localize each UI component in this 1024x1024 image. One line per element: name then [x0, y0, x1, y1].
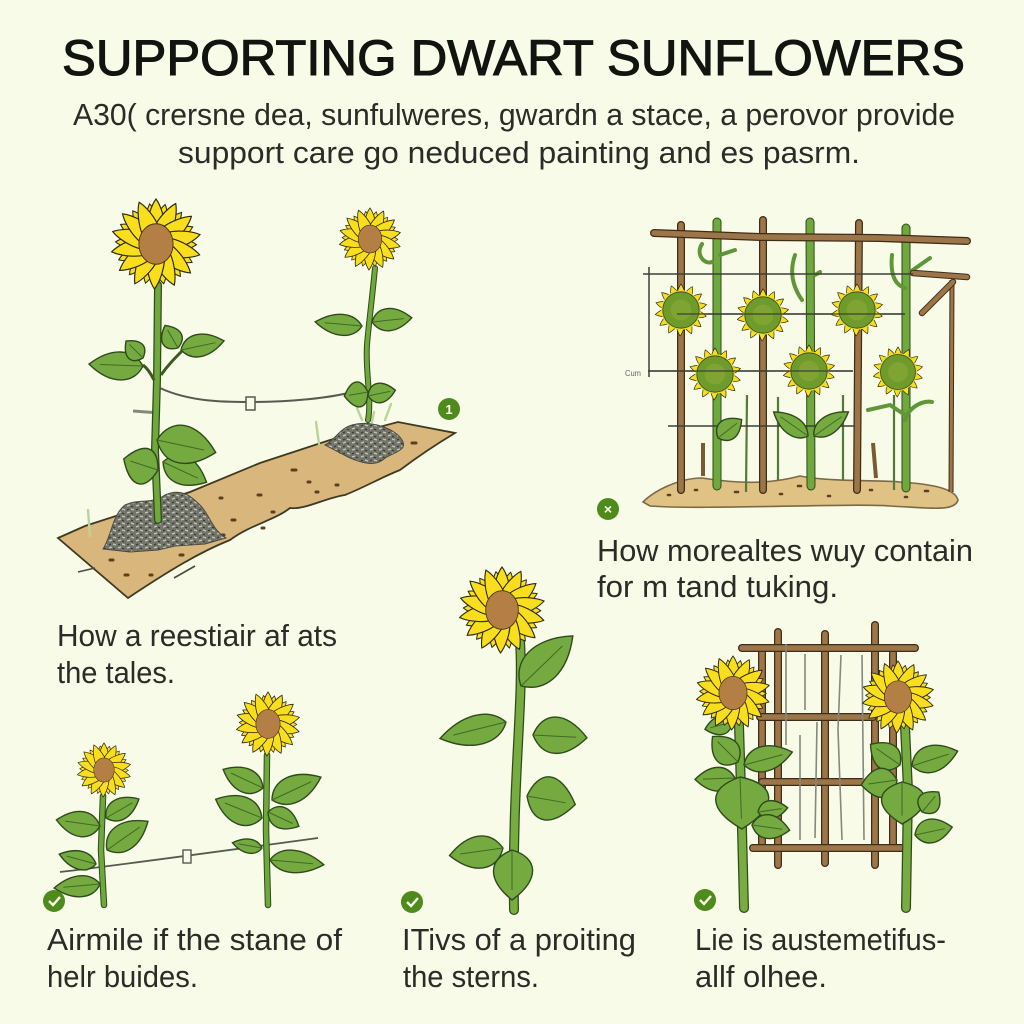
- panel: single sunflower: [437, 563, 588, 910]
- icon: step 1 badge: 1: [445, 402, 453, 417]
- small measurement label: Cum: [625, 369, 641, 378]
- wires over flowers: [648, 314, 905, 371]
- top rail and brace: [654, 233, 967, 313]
- caption: lattice trellis: [695, 922, 946, 994]
- intro text: support care go neduced painting and es pasrm.: [178, 135, 860, 170]
- plant: small left: [53, 741, 155, 905]
- tie line with clip: [60, 838, 318, 872]
- title: SUPPORTING DWART SUNFLOWERS: [62, 30, 965, 86]
- soil specks: [110, 443, 416, 575]
- guy line with clip: [133, 388, 352, 413]
- icon: step 2 badge: [597, 498, 619, 520]
- panel: soil strip with guy line: [58, 195, 455, 598]
- icon: step 2 badge: ×: [604, 501, 612, 517]
- panel: tall trellis: [625, 220, 967, 508]
- panel: lattice trellis: [692, 625, 962, 908]
- caption: panel one: How a reestiair af ats: [57, 618, 337, 653]
- plant: right: [314, 205, 413, 420]
- gravel mound right: [325, 423, 404, 463]
- horizontal wires: [643, 267, 913, 426]
- caption: two staked plants: Airmile if the stane of: [47, 922, 342, 957]
- intro text: [73, 97, 955, 170]
- caption: single sunflower: ITivs of a proiting: [402, 922, 636, 957]
- caption: tall trellis: [597, 533, 973, 604]
- icon: step 1 badge: [438, 398, 460, 420]
- icon: check badge right: [694, 889, 716, 911]
- plant: tall left: [89, 195, 226, 520]
- gravel mound left: [103, 492, 226, 552]
- icon: check badge left: [43, 890, 65, 912]
- caption: single sunflower: [402, 922, 636, 994]
- caption: lattice trellis: allf olhee.: [695, 959, 827, 994]
- soil strip: [58, 422, 455, 598]
- wooden posts: [681, 220, 952, 492]
- lattice frame: [742, 625, 915, 865]
- intro text: A30( crersne dea, sunfulweres, gwardn a stace, a perovor provide: [73, 97, 955, 132]
- trellis leaves: [711, 404, 853, 446]
- caption: single sunflower: the sterns.: [403, 959, 539, 994]
- soil bed: [643, 476, 958, 508]
- grass tufts: [88, 404, 391, 536]
- plant: lattice left: [692, 653, 795, 908]
- panel: two staked plants: [53, 689, 326, 905]
- green stems: [700, 222, 932, 492]
- caption: two staked plants: helr buides.: [47, 959, 198, 994]
- caption: two staked plants: [47, 922, 342, 994]
- plant: lattice right: [858, 658, 962, 908]
- caption: lattice trellis: Lie is austemetifus-: [695, 922, 946, 957]
- caption: tall trellis: How morealtes wuy contain: [597, 533, 973, 568]
- caption: tall trellis: for m tand tuking.: [597, 569, 838, 604]
- caption: panel one: [57, 618, 337, 690]
- sunflowers on trellis: [654, 284, 923, 400]
- plant: small right: [210, 689, 326, 905]
- caption: panel one: the tales.: [57, 655, 175, 690]
- icon: check badge centre: [401, 891, 423, 913]
